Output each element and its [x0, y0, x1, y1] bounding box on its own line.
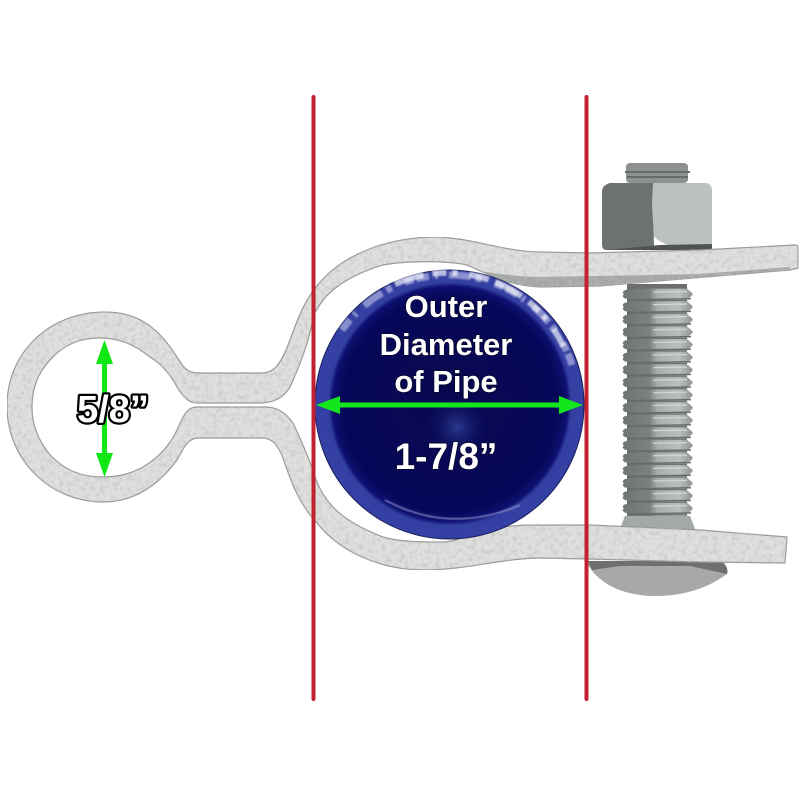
upper strap and eye — [7, 237, 798, 407]
green arrow: pipe diameter — [316, 396, 583, 414]
red line left — [312, 95, 316, 701]
label: 1-7/8 inch: 1-7/8” — [395, 436, 497, 477]
bolt tip above nut — [625, 163, 690, 183]
bolt collar — [619, 516, 696, 531]
label: 5/8 inch: 5/8” — [77, 389, 149, 431]
label: outer diameter of pipe — [380, 289, 512, 399]
bolt head — [588, 561, 727, 596]
hinge strap — [7, 237, 798, 570]
eye seam patch — [8, 403, 31, 409]
threaded bolt shaft — [619, 284, 696, 531]
label: outer diameter of pipe: of Pipe — [394, 364, 498, 399]
hex nut — [602, 183, 712, 250]
red line right — [584, 95, 588, 701]
upper strap underside shadow — [480, 267, 790, 287]
pipe circle — [315, 270, 584, 539]
label: outer diameter of pipe: Outer — [405, 289, 487, 324]
green arrow: eye opening — [96, 340, 113, 477]
lower strap and eye — [7, 406, 787, 570]
label: outer diameter of pipe: Diameter — [380, 327, 512, 362]
